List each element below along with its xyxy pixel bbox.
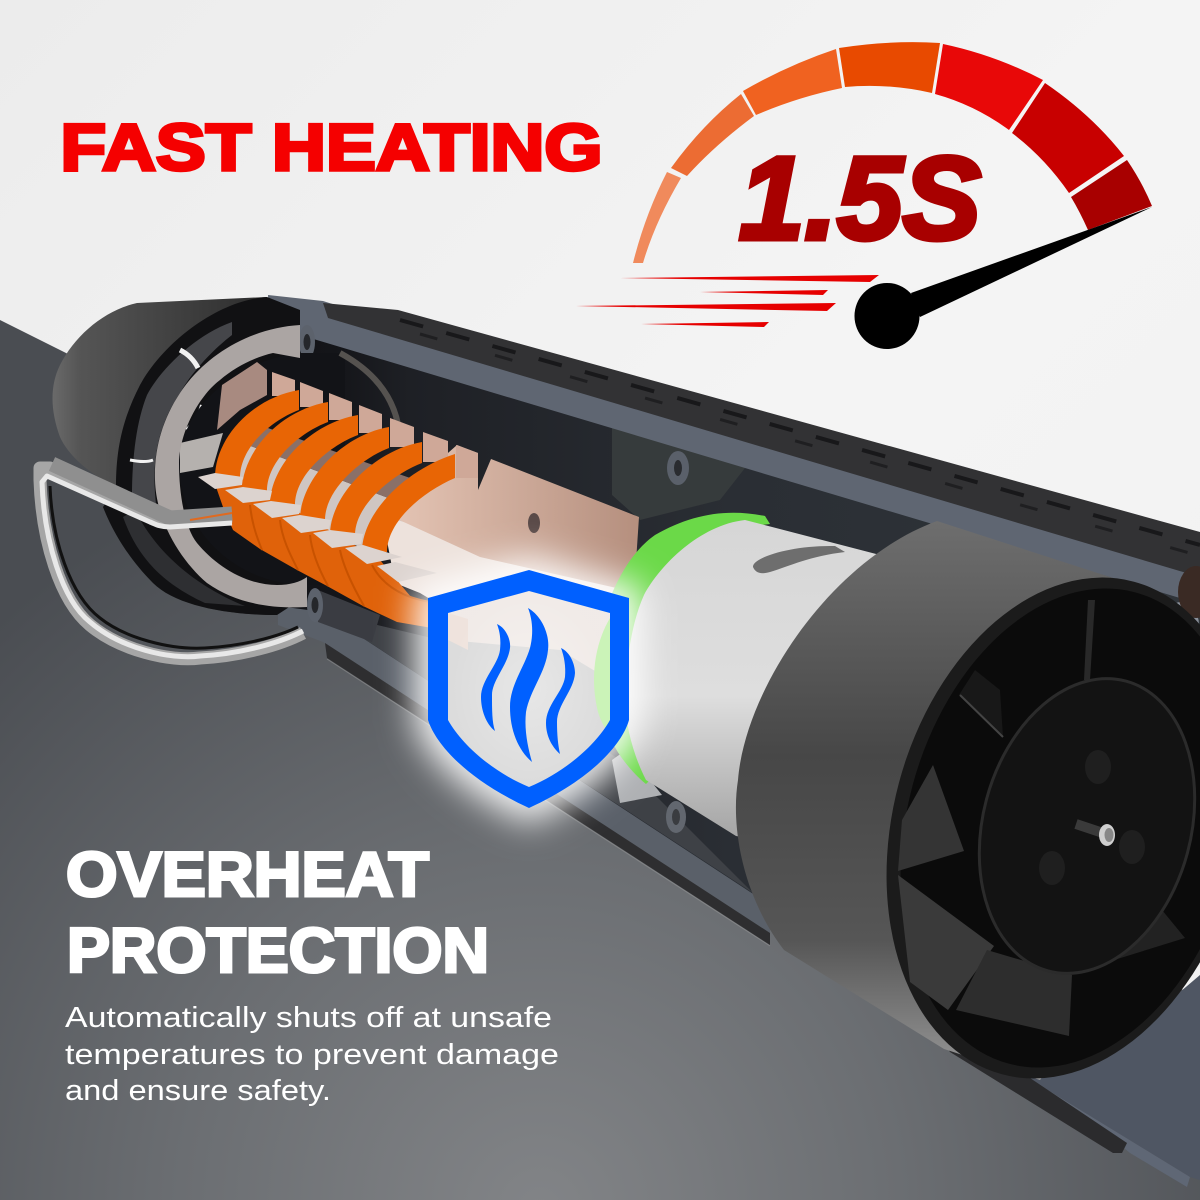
heat waves xyxy=(481,608,575,762)
orange coils xyxy=(215,390,455,552)
motor slot xyxy=(753,546,845,573)
top tabs xyxy=(272,372,478,478)
motor shaft xyxy=(1076,824,1115,846)
plate hole xyxy=(528,513,540,533)
speed gauge xyxy=(576,42,1152,349)
left fan cup xyxy=(52,297,345,615)
back ring in cavity xyxy=(340,353,400,440)
lower rail xyxy=(278,606,770,942)
right fan xyxy=(736,521,1200,1120)
cup body xyxy=(52,297,277,615)
screw posts xyxy=(299,325,1200,833)
heating element xyxy=(180,362,640,660)
fan cylinder xyxy=(736,521,1200,1080)
band behind coils xyxy=(235,420,430,510)
description text: Automatically shuts off at unsafe xyxy=(65,1002,552,1034)
lower foam strip xyxy=(325,643,770,946)
black band and lower glass xyxy=(103,297,300,615)
shield outline xyxy=(428,570,629,808)
description text: and ensure safety. xyxy=(65,1075,331,1107)
lower glass highlight xyxy=(123,510,245,606)
gauge value: 1.5S xyxy=(739,133,981,265)
lower interior floor xyxy=(323,612,753,893)
heading: overheat protection: OVERHEAT xyxy=(66,840,429,910)
gauge arc segments xyxy=(633,42,1152,263)
left bracket slab xyxy=(180,433,223,473)
upper glass crescent xyxy=(132,322,232,518)
heading: overheat protection: PROTECTION xyxy=(67,916,489,986)
floor surface xyxy=(0,320,1200,1200)
rubber foam strip xyxy=(323,303,1200,577)
heading: overheat protection xyxy=(66,840,489,986)
ring opening xyxy=(179,353,345,585)
motor xyxy=(595,513,880,840)
motor body xyxy=(624,520,880,840)
fan hub xyxy=(948,654,1200,998)
heading: fast heating: FAST HEATING xyxy=(60,110,602,184)
bulge creases xyxy=(250,505,438,606)
shield glow xyxy=(428,570,629,808)
interior bracket xyxy=(612,425,745,520)
base slab xyxy=(385,520,640,660)
left plate xyxy=(217,362,267,430)
fan rim xyxy=(833,536,1200,1120)
glass highlights xyxy=(130,350,202,462)
foot tabs xyxy=(198,473,437,582)
interior light bracket xyxy=(612,750,662,803)
slab behind coils xyxy=(225,440,420,555)
fan blades xyxy=(898,600,1185,1036)
description text xyxy=(65,1002,559,1107)
speed lines xyxy=(576,275,879,327)
green ring xyxy=(595,513,770,784)
lower coil bulge xyxy=(215,478,440,628)
heater housing xyxy=(268,295,1200,1187)
right end of housing xyxy=(947,975,1200,1187)
description text: temperatures to prevent damage xyxy=(65,1039,559,1071)
shield interior xyxy=(448,591,610,787)
interior cavity xyxy=(270,310,1200,925)
upper rail xyxy=(268,295,1200,604)
needle xyxy=(854,207,1152,349)
retaining ring xyxy=(155,325,307,607)
icon: blue shield with heat waves xyxy=(428,570,629,808)
hub dimples xyxy=(1039,750,1145,885)
copper plate xyxy=(395,445,639,592)
silver wire xyxy=(40,464,303,659)
fan opening xyxy=(849,550,1200,1106)
